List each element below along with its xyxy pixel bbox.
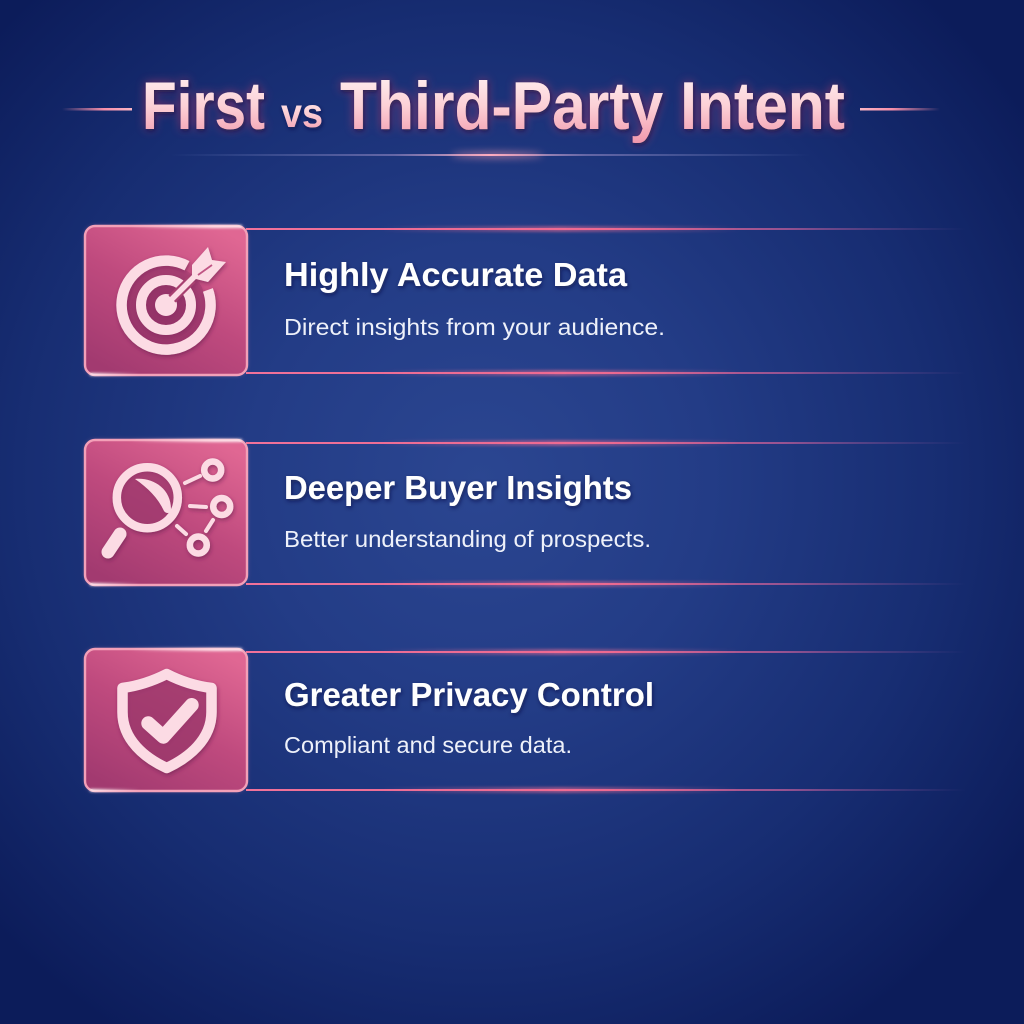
description: Compliant and secure data. bbox=[284, 732, 572, 758]
icon: target with arrow bbox=[122, 247, 226, 350]
title underline glow bbox=[170, 152, 810, 158]
description: Direct insights from your audience. bbox=[284, 314, 665, 340]
card bbox=[85, 648, 247, 792]
card bbox=[85, 439, 247, 586]
heading: Deeper Buyer Insights bbox=[284, 469, 632, 506]
title text: First bbox=[142, 68, 265, 144]
icon: shield with check mark bbox=[122, 674, 212, 768]
title text: vs bbox=[281, 90, 323, 136]
panel: deeper buyer insights bbox=[85, 439, 966, 587]
heading: Highly Accurate Data bbox=[284, 256, 628, 293]
title text bbox=[142, 68, 845, 144]
title text: Third-Party Intent bbox=[340, 68, 845, 144]
row lines bbox=[246, 440, 966, 587]
card bbox=[85, 225, 247, 376]
title bbox=[62, 68, 940, 158]
icon: magnifier with network nodes bbox=[108, 462, 230, 554]
panel: highly accurate data bbox=[85, 225, 966, 376]
description: Better understanding of prospects. bbox=[284, 526, 651, 552]
row lines bbox=[246, 226, 966, 376]
title glow: Third-Party Intent bbox=[340, 68, 845, 144]
title left accent line bbox=[62, 108, 132, 110]
row lines bbox=[246, 649, 966, 793]
title glow: First bbox=[142, 68, 265, 144]
title right accent line bbox=[860, 108, 940, 110]
title glow bbox=[142, 68, 845, 144]
panel: greater privacy control bbox=[85, 648, 966, 793]
heading: Greater Privacy Control bbox=[284, 676, 654, 713]
